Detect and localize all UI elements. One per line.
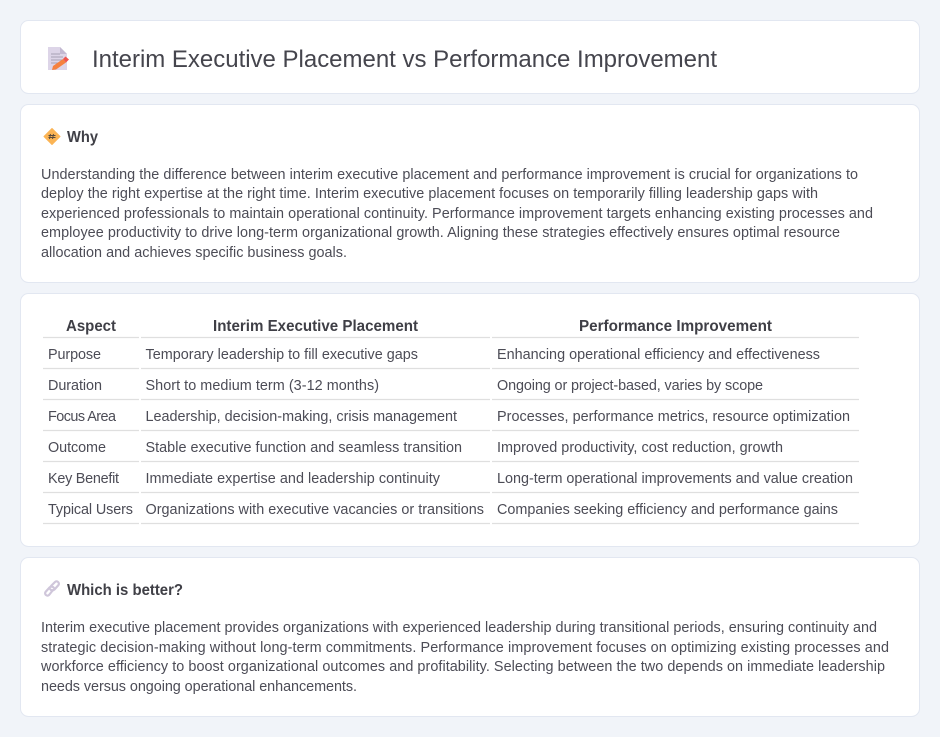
text block: why explanation: deploy the right expertise at the right time. Interim executive placement focuses on temporarily filling leadership gaps with <box>41 186 818 202</box>
row: focus area: Processes, performance metrics, resource optimization <box>497 409 850 425</box>
text block: which is better explanation: Interim executive placement provides organizations with experienced leadership during transitional periods, ensuring continuity and <box>41 620 877 636</box>
row: key benefit <box>48 471 853 487</box>
panel: title card <box>20 20 920 94</box>
panel: comparison table <box>20 294 920 546</box>
text block: which is better explanation: needs versus ongoing operational enhancements. <box>41 679 357 695</box>
row: typical users: Organizations with executive vacancies or transitions <box>146 502 484 518</box>
row: purpose <box>48 347 820 363</box>
text block: why explanation: allocation and achieves specific business goals. <box>41 245 347 261</box>
table header <box>66 318 773 335</box>
row: typical users <box>48 502 838 518</box>
row: duration: Duration <box>48 378 102 394</box>
icon: document with pencil <box>48 47 69 70</box>
text block: why explanation: Understanding the difference between interim executive placement and performance improvement is crucial for organizations to <box>41 167 858 183</box>
row: duration <box>48 378 763 394</box>
heading: why: Why <box>67 129 98 146</box>
row: outcome: Improved productivity, cost reduction, growth <box>497 440 783 456</box>
row: focus area: Leadership, decision-making, crisis management <box>146 409 457 425</box>
row: key benefit: Key Benefit <box>48 471 119 487</box>
icon: link <box>45 581 59 596</box>
title: Interim Executive Placement vs Performance Improvement <box>92 46 717 73</box>
text block: which is better explanation <box>40 620 889 695</box>
text block: which is better explanation: workforce efficiency to boost organizational outcomes and profitability. Selecting between the two depends on immediate leadership <box>40 659 885 675</box>
row: key benefit: Long-term operational improvements and value creation <box>497 471 853 487</box>
text block: which is better explanation: strategic decision-making without long-term commitments. Performance improvement focuses on optimizing existing processes and <box>41 640 889 656</box>
row: outcome: Outcome <box>48 440 106 456</box>
heading: which is better: Which is better? <box>67 582 183 599</box>
table header: Aspect <box>66 318 117 335</box>
row: focus area <box>48 409 850 425</box>
row: duration: Short to medium term (3-12 months) <box>146 378 379 394</box>
icon: diamond sign <box>44 128 60 144</box>
panel: why <box>20 104 920 282</box>
row: key benefit: Immediate expertise and leadership continuity <box>146 471 441 487</box>
row: outcome <box>48 440 783 456</box>
row: typical users: Typical Users <box>48 502 133 518</box>
row: typical users: Companies seeking efficiency and performance gains <box>497 502 838 518</box>
table header: Performance Improvement <box>579 318 773 335</box>
row: purpose: Enhancing operational efficiency and effectiveness <box>497 347 820 363</box>
row: purpose: Purpose <box>48 347 101 363</box>
row: focus area: Focus Area <box>48 409 116 425</box>
panel: which is better <box>20 558 920 716</box>
row: purpose: Temporary leadership to fill executive gaps <box>146 347 418 363</box>
row: duration: Ongoing or project-based, varies by scope <box>497 378 763 394</box>
table header: Interim Executive Placement <box>213 318 419 335</box>
text block: why explanation <box>41 167 873 261</box>
text block: why explanation: employee productivity to drive long-term organizational growth. Aligning these strategies effectively ensures optimal resource <box>41 225 840 241</box>
row: outcome: Stable executive function and seamless transition <box>146 440 462 456</box>
text block: why explanation: experienced professionals to maintain operational continuity. Performance improvement targets enhancing existing processes and <box>41 206 873 222</box>
